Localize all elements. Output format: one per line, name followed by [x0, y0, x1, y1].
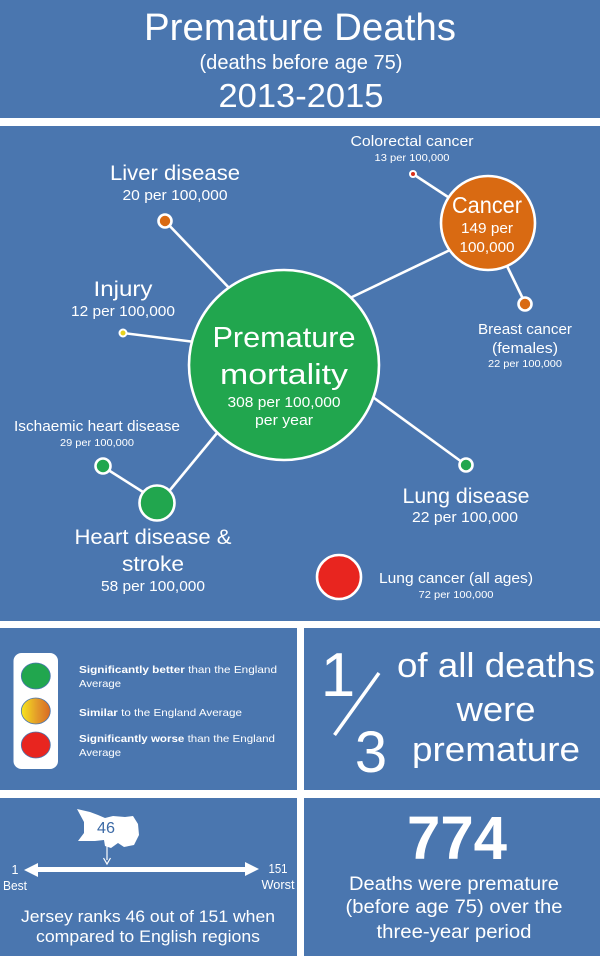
- subtitle: (deaths before age 75): [200, 52, 402, 74]
- text: of all deaths were premature: of all deaths: [397, 647, 595, 685]
- label: ischaemic heart disease: Ischaemic heart disease: [14, 418, 180, 435]
- label: injury: 12 per 100,000: [71, 303, 175, 320]
- label: liver disease: Liver disease: [110, 162, 240, 185]
- circle: cancer: Cancer: [452, 192, 522, 218]
- circle: cancer: 149 per: [461, 220, 513, 237]
- icon: liver disease dot: [158, 214, 172, 228]
- text: deaths statement: Deaths were premature: [349, 874, 559, 895]
- label: rank 1 best: Best: [3, 879, 28, 893]
- label: rank 151 worst: 151: [268, 862, 288, 876]
- label: lung cancer: [379, 570, 533, 601]
- fraction: 1/3: [321, 641, 387, 785]
- label: lung cancer: Lung cancer (all ages): [379, 570, 533, 587]
- icon: injury dot: [120, 330, 126, 336]
- panel: mortality diagram: [0, 126, 600, 621]
- panel: header: [0, 0, 600, 118]
- legend text: better: Significantly better than the England: [79, 664, 277, 676]
- text: deaths statement: three-year period: [376, 922, 532, 943]
- icon: traffic light: [14, 653, 58, 769]
- legend text: better: [79, 664, 277, 690]
- label: colorectal cancer: 13 per 100,000: [374, 152, 450, 164]
- text: ranking statement: [21, 908, 275, 946]
- text: of all deaths were premature: [397, 647, 595, 769]
- icon: Jersey map: [77, 809, 139, 848]
- label: injury: [71, 278, 175, 320]
- icon: lung disease dot: [460, 458, 472, 472]
- label: colorectal cancer: Colorectal cancer: [350, 133, 474, 150]
- arrow: rank marker: [104, 843, 110, 864]
- label: ischaemic heart disease: [14, 418, 180, 449]
- label: breast cancer: [478, 321, 572, 370]
- icon: ischaemic dot: [96, 458, 110, 474]
- label: injury: Injury: [94, 278, 153, 301]
- connector lines: [102, 174, 525, 492]
- icon: Jersey map: 46: [97, 820, 115, 837]
- label: heart disease and stroke: Heart disease &: [74, 526, 232, 549]
- label: ischaemic heart disease: 29 per 100,000: [60, 437, 134, 449]
- title: Premature Deaths: [144, 7, 456, 49]
- date range: 2013-2015: [218, 77, 384, 114]
- circle: premature mortality: Premature: [212, 322, 356, 354]
- circle: cancer: 100,000: [460, 239, 514, 256]
- label: rank 151 worst: [262, 862, 295, 892]
- panel: ranking: [0, 798, 297, 956]
- icon: lung cancer circle: [317, 555, 361, 599]
- label: rank 1 best: 1: [12, 863, 19, 877]
- arrow: scale: [24, 862, 259, 877]
- icon: heart disease circle: [140, 486, 174, 520]
- legend text: worse: [79, 733, 275, 759]
- legend text: better: Average: [79, 678, 121, 690]
- legend text: worse: Average: [79, 747, 121, 759]
- circle: premature mortality: 308 per 100,000: [228, 394, 340, 411]
- label: breast cancer: Breast cancer: [478, 321, 572, 338]
- circle: premature mortality: per year: [255, 412, 313, 429]
- label: liver disease: [110, 162, 240, 204]
- text: ranking statement: compared to English regions: [36, 928, 260, 946]
- big number: 774: 774: [407, 804, 507, 872]
- label: breast cancer: (females): [492, 340, 558, 357]
- legend text: similar: Similar to the England Average: [79, 707, 242, 719]
- label: lung disease: [402, 485, 530, 526]
- legend text: worse: Significantly worse than the England: [79, 733, 275, 745]
- label: heart disease and stroke: stroke: [122, 553, 184, 576]
- label: liver disease: 20 per 100,000: [122, 187, 228, 204]
- icon: colorectal dot: [410, 171, 416, 177]
- label: lung cancer: 72 per 100,000: [418, 589, 494, 601]
- fraction: 1/3: 3: [355, 720, 387, 785]
- text: of all deaths were premature: were: [455, 691, 536, 729]
- label: colorectal cancer: [350, 133, 474, 164]
- circle: premature mortality: [189, 270, 379, 460]
- label: lung disease: Lung disease: [402, 485, 530, 508]
- panel: one third: [304, 628, 600, 790]
- label: breast cancer: 22 per 100,000: [488, 358, 562, 370]
- text: deaths statement: [346, 874, 562, 943]
- label: heart disease and stroke: [74, 526, 232, 595]
- panel: total deaths: [304, 798, 600, 956]
- text: of all deaths were premature: premature: [412, 731, 580, 769]
- circle: cancer: [441, 176, 535, 270]
- icon: breast cancer dot: [518, 298, 532, 310]
- fraction: 1/3: 1: [321, 641, 355, 710]
- text: ranking statement: Jersey ranks 46 out of 151 when: [21, 908, 275, 926]
- text: deaths statement: (before age 75) over the: [346, 897, 562, 918]
- label: rank 1 best: [3, 863, 28, 893]
- circle: premature mortality: mortality: [220, 359, 349, 391]
- label: lung disease: 22 per 100,000: [412, 509, 518, 526]
- label: rank 151 worst: Worst: [262, 878, 295, 892]
- panel: legend: [0, 628, 297, 790]
- label: heart disease and stroke: 58 per 100,000: [101, 578, 205, 595]
